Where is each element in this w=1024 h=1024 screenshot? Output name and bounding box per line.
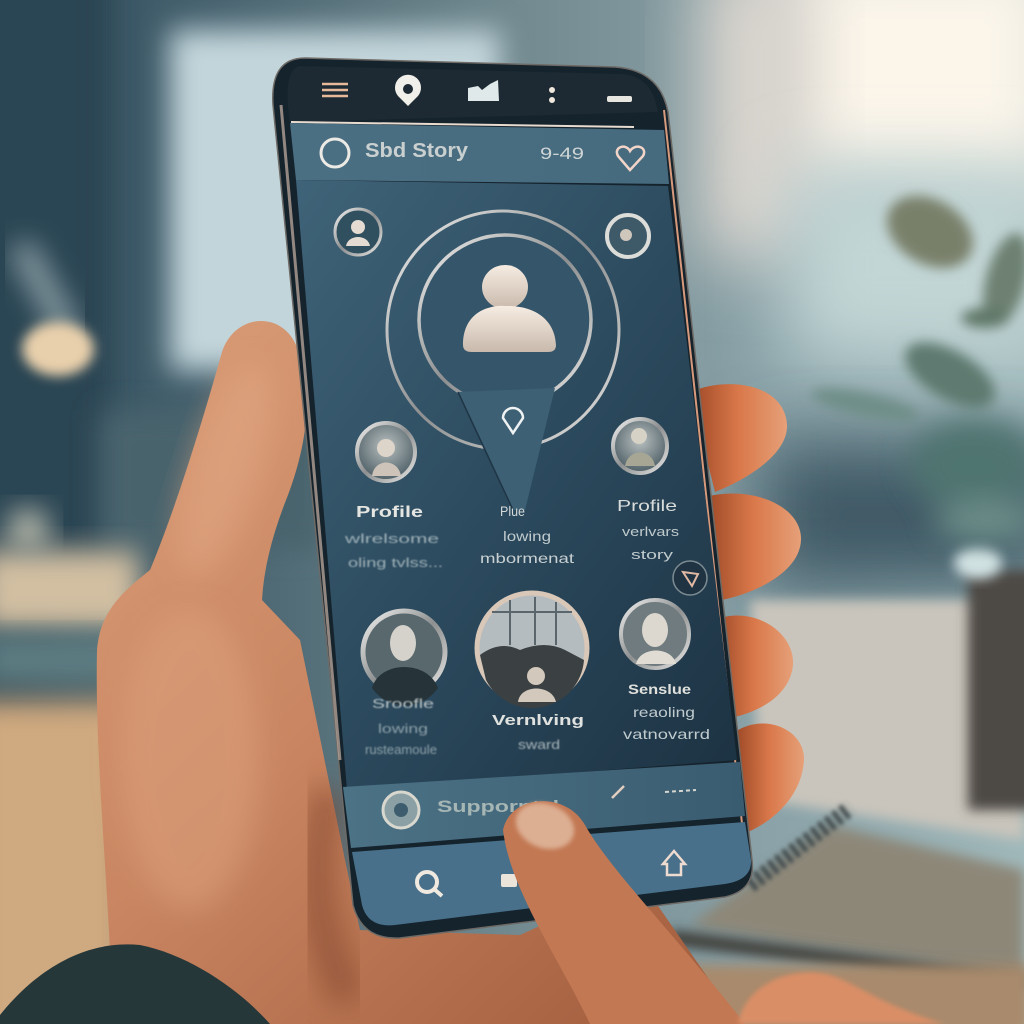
dots bbox=[665, 790, 696, 792]
suggestion bar bbox=[343, 762, 745, 848]
avatar bbox=[613, 419, 667, 473]
icon: home bbox=[663, 851, 685, 875]
icon: ring bbox=[383, 792, 419, 828]
profile centre text: Plue bbox=[500, 503, 525, 519]
background: desk right bbox=[750, 600, 1024, 840]
pointing finger bbox=[503, 795, 745, 1024]
finger 2 bbox=[705, 494, 801, 600]
label: Supporntal bbox=[437, 797, 559, 816]
finger 4 bbox=[735, 724, 804, 832]
small badge bbox=[673, 561, 707, 595]
background: dark wall right-lower bbox=[760, 440, 1024, 590]
bottom avatar left bbox=[363, 611, 445, 757]
outer ring bbox=[387, 211, 619, 449]
hand: palm and thumb bbox=[0, 321, 740, 1024]
profile centre text bbox=[480, 503, 574, 566]
icon: search bbox=[417, 872, 437, 892]
bottom avatar right bbox=[621, 600, 710, 742]
label: Profile bbox=[356, 504, 423, 521]
person body bbox=[463, 306, 556, 352]
icon: pen bbox=[612, 786, 624, 798]
background: bright window right bbox=[770, 0, 1024, 190]
background: wood table left bbox=[0, 700, 130, 1024]
label: Vernlving bbox=[492, 712, 584, 729]
profile right: story bbox=[631, 547, 674, 562]
time: 9-49 bbox=[540, 144, 584, 163]
sleeve bbox=[0, 944, 270, 1024]
icon: pin bbox=[395, 75, 421, 106]
fingernail bbox=[509, 795, 581, 857]
background: wood table bottom right bbox=[540, 965, 1024, 1024]
caption: wlrelsome bbox=[343, 531, 439, 546]
phone body bbox=[273, 58, 752, 938]
screen bbox=[296, 180, 737, 790]
caption: lowing bbox=[378, 721, 428, 736]
bottom nav bbox=[352, 822, 751, 925]
hand: back fingers behind phone bbox=[690, 384, 804, 832]
person head bbox=[482, 265, 528, 309]
background: warm light column bbox=[700, 0, 810, 260]
label: Senslue bbox=[628, 681, 691, 697]
pin pointer bbox=[458, 388, 555, 510]
profile left bbox=[343, 423, 443, 570]
pin small icon bbox=[503, 408, 523, 433]
background: lamp stem bbox=[20, 245, 70, 335]
background: mid wall lower-left bbox=[100, 410, 320, 550]
icon: menu bbox=[322, 84, 348, 96]
finger 1 bbox=[690, 384, 787, 492]
foreground finger bottom right bbox=[738, 972, 945, 1024]
thumb highlight bbox=[159, 355, 291, 585]
caption: sward bbox=[518, 737, 560, 752]
caption: verlvars bbox=[622, 524, 680, 539]
background: bright window centre bbox=[170, 30, 500, 370]
label: Profile bbox=[617, 498, 677, 515]
background: plant pot bbox=[968, 570, 1024, 810]
background: plant leaves bbox=[809, 181, 1024, 542]
bottom avatar left: rusteamoule bbox=[365, 742, 437, 757]
icon: chart bbox=[468, 80, 499, 101]
profile left: oling tvlss... bbox=[348, 555, 443, 570]
icon: heart bbox=[617, 147, 644, 170]
bottom avatar centre bbox=[477, 593, 587, 752]
status bar bbox=[288, 66, 658, 127]
top left avatar bbox=[335, 209, 381, 255]
main location pin bbox=[387, 211, 619, 510]
icon: dash bbox=[607, 96, 632, 102]
bottom avatar right: vatnovarrd bbox=[623, 726, 710, 742]
avatar bbox=[357, 423, 415, 481]
background: notebook bbox=[690, 825, 1024, 975]
background: shelf glow left bbox=[0, 550, 140, 630]
icon: ring bbox=[321, 139, 349, 167]
icon: dots bbox=[549, 87, 555, 103]
crowd photo bbox=[480, 645, 584, 708]
top highlight line bbox=[291, 122, 634, 127]
finger 3 bbox=[715, 616, 793, 718]
top right avatar bbox=[607, 215, 649, 257]
profile centre text: mbormenat bbox=[480, 550, 574, 566]
header bar bbox=[290, 123, 669, 184]
inner ring bbox=[419, 235, 591, 405]
profile right bbox=[613, 419, 680, 562]
icon: square bbox=[501, 874, 517, 887]
background: dark top-left wall bbox=[0, 0, 110, 560]
phone rim highlight bbox=[664, 110, 746, 860]
palm crease shadow bbox=[317, 790, 350, 1000]
profile centre text: lowing bbox=[503, 528, 551, 544]
background: teal band left bbox=[0, 635, 130, 685]
palm highlight bbox=[120, 610, 260, 910]
label: Sroofle bbox=[372, 696, 434, 711]
background: lamp glow bbox=[22, 322, 94, 376]
background: window far-right lower bbox=[790, 170, 1024, 360]
caption: reaoling bbox=[633, 704, 695, 720]
header title: Sbd Story bbox=[365, 140, 469, 162]
phone bbox=[273, 58, 752, 938]
background: pot highlight bbox=[954, 547, 1002, 579]
